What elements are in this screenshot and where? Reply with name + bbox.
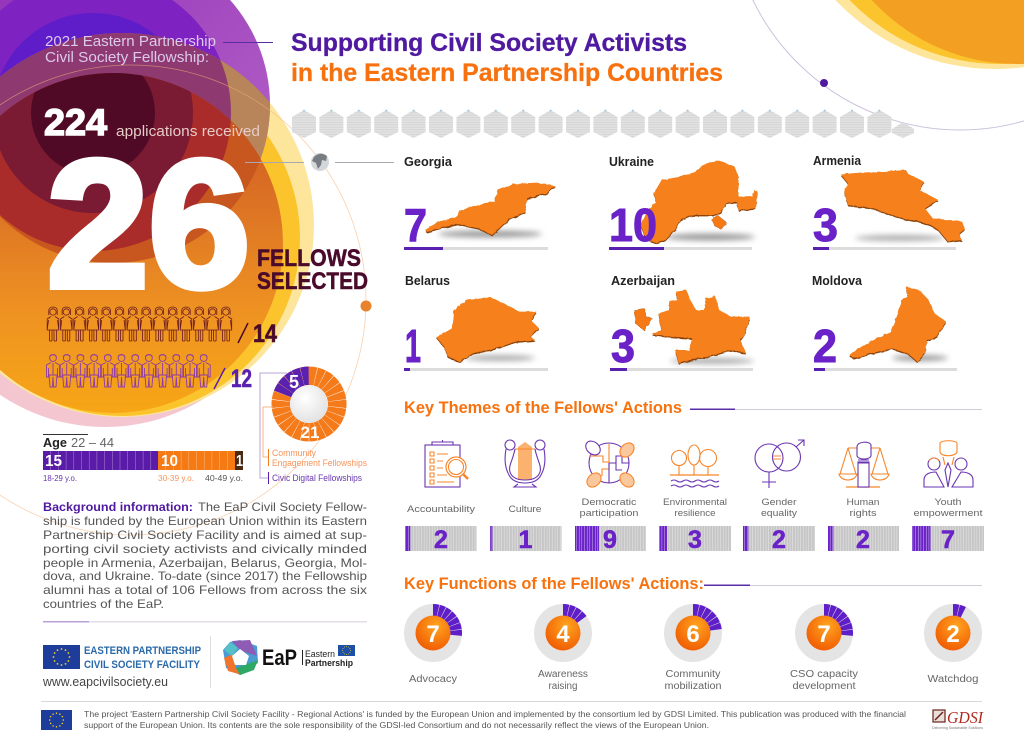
theme: accountability [405,440,476,554]
fellowship label: Civil Society Fellowship: [45,49,209,66]
logo: EaP Eastern Partnership: EaP [262,645,297,670]
theme: environmental resilience: 3 [688,526,702,554]
function: advocacy: 7 [426,621,440,648]
heading: key functions: Key Functions of the Fellows' Actions: [404,575,704,593]
age bar chart: Age [43,435,67,450]
theme: environmental resilience: Environmental [663,497,727,508]
country: Azerbaijan [610,274,754,372]
theme: democratic participation: 9 [603,526,617,554]
theme: gender equality: equality [761,508,797,519]
women count: 14 [253,320,277,348]
women count [238,320,277,348]
function: community mobilization: mobilization [664,681,722,692]
orbit line with purple dot [730,0,1024,130]
theme: accountability: 2 [434,526,448,554]
age bar chart: 22 – 44 [71,435,114,450]
applications count: applications received [116,123,260,140]
orbit line with orange dot [0,65,372,535]
theme: democratic participation: participation [580,508,638,519]
age bar chart: 1 [236,453,243,470]
fellows selected label: SELECTED [257,268,368,295]
theme: human rights: Human [846,497,880,508]
function: CSO capacity development: development [792,681,856,692]
logo: Eastern Partnership Civil Society Facility: www.eapcivilsociety.eu [42,675,168,689]
theme: environmental resilience: resilience [674,508,716,519]
background information text: porting civil society activists and civically minded [43,542,367,556]
theme: environmental resilience [659,445,731,554]
country: Belarus [404,274,548,372]
function: CSO capacity development: CSO capacity [790,669,858,680]
theme: democratic participation [575,438,646,554]
background circles left [0,0,314,427]
applications pictogram row [292,110,914,138]
heading: key themes: Key Themes of the Fellows' Actions [404,399,682,417]
applications count [44,102,260,143]
donut legend: Engagement Fellowships [272,458,367,468]
age bar chart [43,434,243,483]
background information text: people in Armenia, Azerbaijan, Belarus, Georgia, Mol- [43,556,367,570]
theme: gender equality [743,440,815,554]
background information text: alumni has a total of 106 Fellows from across the six [43,583,367,597]
theme: democratic participation: Democratic [582,497,637,508]
logo: GDSI: GDSI [947,708,984,727]
function: awareness raising [538,610,588,692]
age bar chart: 10 [161,453,178,470]
title: in the Eastern Partnership Countries [291,59,723,87]
country: Moldova: Moldova [812,274,863,288]
background information text: Partnership Civil Society Facility and is aimed at sup- [43,528,367,542]
theme: human rights: 2 [856,526,870,554]
background information text [43,500,367,611]
function: community mobilization: 6 [686,621,700,648]
function: advocacy: Advocacy [409,674,457,685]
theme: youth empowerment: 7 [941,526,955,554]
function: watchdog [928,610,978,685]
function: advocacy [409,610,457,685]
function: awareness raising: 4 [556,621,570,648]
fellows selected label [257,245,368,295]
age bar chart: 15 [45,453,62,470]
function: awareness raising: raising [548,681,578,692]
background information text: The EaP Civil Society Fellow- [198,500,367,514]
country: Georgia [404,155,556,251]
fellowship label [45,33,273,66]
logo: Eastern Partnership Civil Society Facility: EASTERN PARTNERSHIP [84,645,201,657]
country: Georgia: 7 [404,199,427,251]
fellowship type donut: 5 [289,372,299,392]
country: Armenia [813,154,965,251]
donut legend: Civic Digital Fellowships [272,473,362,483]
fellows selected label: FELLOWS [257,245,361,272]
country: Azerbaijan: 3 [611,320,635,372]
footer disclaimer: support of the European Union. Its contents are the sole responsibility of the GDSI-led Consortium and do not necessarily reflect the views of the European Union. [84,720,709,730]
fellowship type donut [273,368,345,442]
theme: gender equality: 2 [772,526,786,554]
theme: culture [490,440,562,554]
country: Azerbaijan: Azerbaijan [611,274,675,288]
logo: GDSI [932,708,984,730]
theme: human rights: rights [850,508,877,519]
footer disclaimer [41,709,906,730]
men count [214,365,252,393]
country: Ukraine [609,155,758,251]
men count: 12 [231,365,252,393]
logo: Eastern Partnership Civil Society Facility: CIVIL SOCIETY FACILITY [84,659,201,671]
background information text: ship is funded by the European Union within its Eastern [43,514,367,528]
function: watchdog: Watchdog [928,674,978,685]
donut legend: Community [272,448,316,458]
function: community mobilization: Community [666,669,720,680]
function: awareness raising: Awareness [538,669,588,680]
function: CSO capacity development: 7 [817,621,831,648]
background information text: countries of the EaP. [43,597,164,611]
logo: EaP Eastern Partnership [223,640,355,675]
applications count: 224 [44,102,107,143]
fellowship label: 2021 Eastern Partnership [45,33,216,50]
donut legend [260,373,367,484]
men pictogram [46,355,210,387]
background information text: dova, and Ukraine. To-date (since 2017) the Fellowship [43,569,367,583]
theme: youth empowerment: Youth [934,497,962,508]
theme: culture: 1 [519,526,533,554]
fellows count 26: 26 [47,124,250,326]
theme: human rights [828,442,899,554]
background information text: Background information: [43,500,193,514]
country: Belarus: 1 [405,320,421,372]
title [291,29,723,87]
function: community mobilization [664,610,722,692]
footer disclaimer: The project 'Eastern Partnership Civil Society Facility - Regional Actions' is funded by the European Union and implemented by the consortium led by GDSI Limited. This publication was produced with the financial [84,709,906,719]
country: Ukraine: 10 [609,199,657,251]
logo: Eastern Partnership Civil Society Facility [42,645,201,689]
function: CSO capacity development [790,610,858,692]
logo: EaP Eastern Partnership: Eastern [305,649,335,659]
theme: culture: Culture [508,504,542,515]
country: Armenia: Armenia [813,154,862,168]
theme: youth empowerment [912,441,984,554]
country: Moldova: 2 [813,320,837,372]
logo: EaP Eastern Partnership: Partnership [305,658,353,668]
theme: gender equality: Gender [762,497,796,508]
country: Ukraine: Ukraine [609,155,654,169]
women pictogram [47,307,232,341]
age bar chart: 30-39 y.o. [158,473,194,483]
fellowship type donut: 21 [301,423,319,442]
age bar chart: 18-29 y.o. [43,473,77,483]
background circles top right [776,0,1024,69]
age bar chart: 40-49 y.o. [205,473,243,483]
country: Moldova [812,274,957,372]
theme: accountability: Accountability [407,504,475,515]
country: Georgia: Georgia [404,155,453,169]
country: Belarus: Belarus [405,274,450,288]
logo: GDSI: Delivering Sustainable Solutions [932,726,983,730]
country: Armenia: 3 [813,199,838,251]
globe icon with connector [245,153,394,171]
function: watchdog: 2 [946,621,960,648]
title: Supporting Civil Society Activists [291,29,687,57]
theme: youth empowerment: empowerment [914,508,983,519]
